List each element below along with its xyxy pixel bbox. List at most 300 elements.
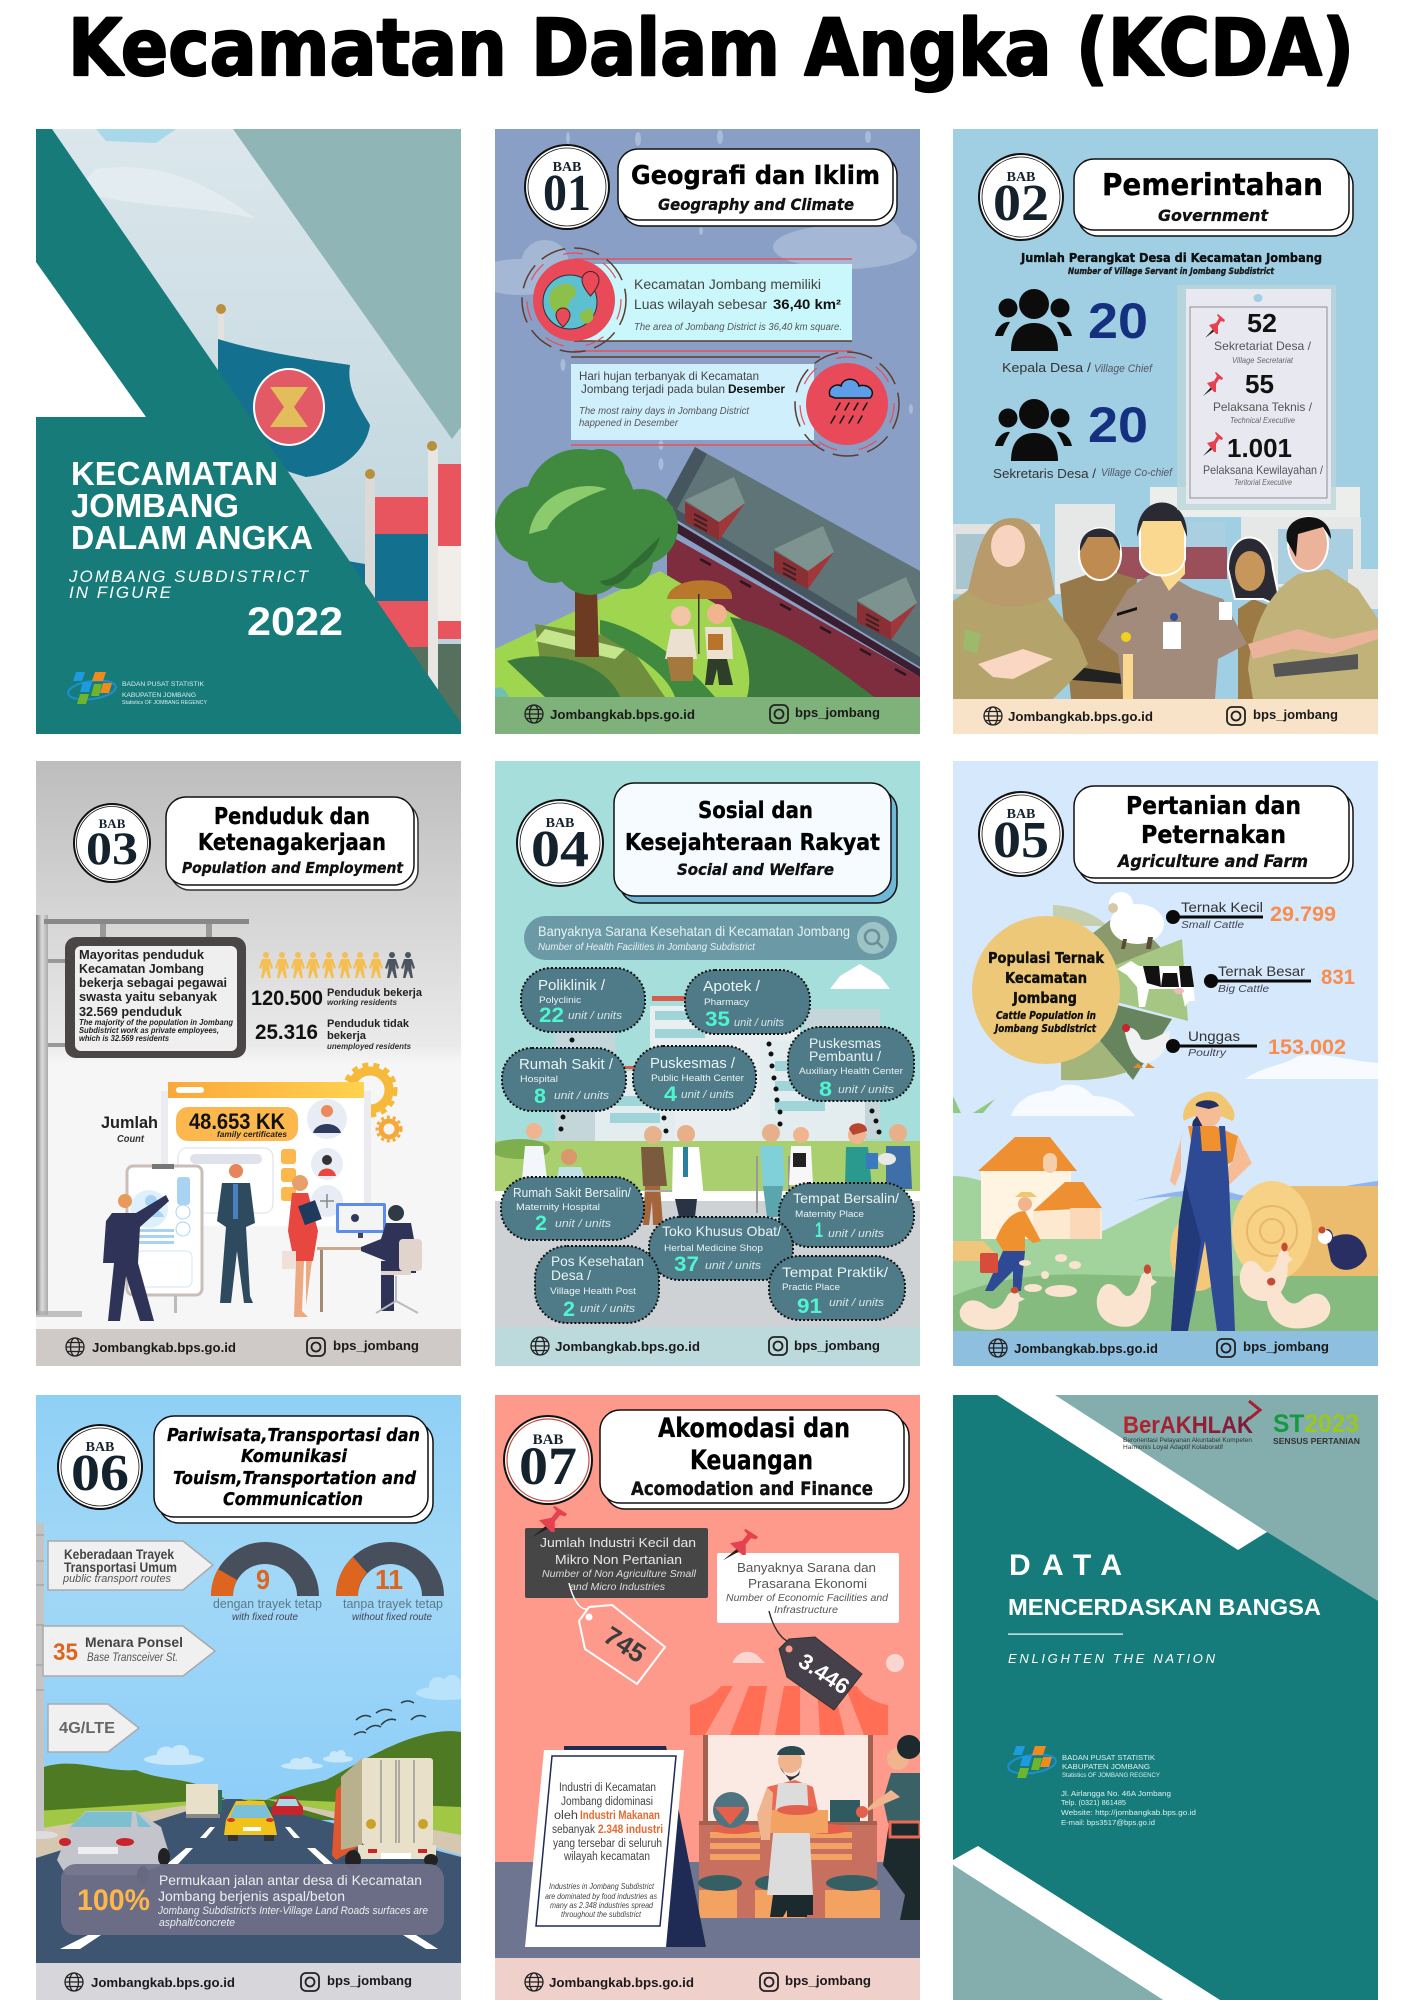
panel: Bab 05 agriculture and farm (953, 761, 1378, 1366)
market stall (690, 1686, 888, 1918)
bubble: herbal medicine shop: 37 (674, 1253, 699, 1276)
callout: big cattle (1204, 963, 1355, 995)
a-frame sign: oleh (554, 1810, 578, 1822)
sign: base transceiver station: 35 (53, 1639, 78, 1666)
sign: base transceiver station: Base Transceiver St. (87, 1650, 178, 1664)
bubble: public health center: Puskesmas / (650, 1055, 736, 1072)
area text: The area of Jombang District is 36,40 km square. (634, 322, 842, 333)
footer (36, 1329, 461, 1366)
flag: blue and red (350, 469, 428, 647)
gauge: without fixed route: tanpa trayek tetap (343, 1596, 443, 1611)
bubble: herbal medicine shop: Herbal Medicine Shop (664, 1243, 763, 1254)
chapter title box (614, 783, 897, 903)
staff card: Technical Executive (1230, 416, 1295, 425)
panel: back cover (953, 1395, 1378, 2000)
BPS logo and contact: E-mail: bps3517@bps.go.id (1061, 1818, 1155, 1827)
ground and road (490, 1139, 920, 1329)
bubble: polyclinic (521, 968, 645, 1032)
bubble: polyclinic: unit / units (568, 1010, 623, 1022)
stat: village co-chief (993, 397, 1173, 481)
sign: public transport routes: public transport routes (62, 1573, 171, 1585)
tree (495, 449, 678, 657)
chapter title box (618, 149, 897, 226)
a-frame sign: Industri Makanan (580, 1810, 660, 1822)
staff card: Sekretariat Desa / (1214, 339, 1312, 353)
footer: Jombangkab.bps.go.id (550, 707, 695, 722)
BPS logo: BADAN PUSAT STATISTIK (122, 681, 205, 688)
chapter title box: Acomodation and Finance (631, 1478, 873, 1500)
chapter title box (154, 1416, 433, 1523)
chapter badge: 06 (71, 1445, 129, 1502)
panel: Bab 01 geography and climate (475, 129, 920, 734)
doctor (672, 1125, 704, 1217)
bubble: pharmacy: Apotek / (703, 978, 761, 995)
bubble: maternity hospital (501, 1177, 644, 1240)
a-frame sign: wilayah kecamatan (563, 1851, 650, 1863)
employment sign: Subdistrict work as private employees, (79, 1026, 219, 1035)
callout: poultry: 153.002 (1268, 1036, 1346, 1059)
footer: Jombangkab.bps.go.id (92, 1340, 236, 1355)
hospital backdrop (555, 964, 890, 1151)
employment sign: Kecamatan Jombang (79, 961, 204, 976)
man on crutches (757, 1124, 789, 1217)
rainfall text: happened in Desember (579, 418, 679, 429)
official: woman right (1227, 536, 1278, 699)
chapter badge: BAB (546, 816, 574, 831)
population circle: Jombang Subdistrict (993, 1023, 1097, 1035)
watermelon (713, 1792, 749, 1828)
callout: family certificates: family certificates (217, 1129, 287, 1139)
cover title: DALAM ANGKA (71, 519, 313, 556)
a-frame sign: many as 2.348 industries spread (550, 1901, 653, 1910)
gears (345, 1065, 401, 1141)
card: economic facilities: Number of Economic Facilities and (726, 1592, 889, 1604)
sign: base transceiver station (43, 1626, 215, 1676)
vehicle: red car (272, 1796, 303, 1815)
official: central man (1097, 502, 1247, 699)
bubble: public health center: Public Health Center (651, 1073, 744, 1084)
chapter badge: BAB (553, 160, 581, 175)
sign: 4G/LTE (48, 1704, 139, 1752)
bubble: public health center (633, 1046, 756, 1110)
bubble: village health post (535, 1246, 659, 1323)
callout: road surface: Permukaan jalan antar desa di Kecamatan (159, 1872, 422, 1888)
pictogram: working and unemployed ratio (259, 952, 415, 978)
bubble: herbal medicine shop (649, 1217, 793, 1280)
panel: Bab 07 accommodation and finance (495, 1395, 921, 2000)
signpost (36, 915, 249, 1317)
top white stripe (997, 1395, 1267, 1550)
label: count (101, 1113, 158, 1145)
callout: road surface (61, 1864, 444, 1935)
stat: unemployed residents (255, 1018, 411, 1051)
chairs (953, 654, 1378, 699)
bubble: village health post: Village Health Post (550, 1286, 636, 1297)
official: second man (1060, 528, 1137, 699)
icon: rain cloud (795, 352, 899, 456)
flag: ASEAN (216, 304, 370, 477)
footer (953, 1331, 1378, 1366)
chapter badge (525, 145, 609, 229)
population circle: Jombang (1012, 989, 1077, 1007)
chapter title box: Communication (223, 1489, 363, 1510)
search banner: Banyaknya Sarana Kesehatan di Kecamatan Jombang (538, 923, 850, 939)
card: small and micro industries: and Micro Industries (570, 1581, 666, 1593)
logo: BerAKHLAK: BerAKHLAK (1123, 1412, 1254, 1439)
a-frame sign: throughout the subdistrict (561, 1910, 642, 1919)
slogan: DATA (1009, 1549, 1122, 1582)
population circle: Cattle Population in (996, 1010, 1096, 1022)
building roof with dormers (665, 447, 920, 697)
gauge: without fixed route (336, 1542, 444, 1623)
bubble: polyclinic: Poliklinik / (538, 977, 606, 994)
bottom corner shape (953, 1865, 1163, 2000)
callout: big cattle: Ternak Besar (1218, 963, 1305, 979)
panel: Bab 04 social and welfare (490, 761, 920, 1366)
bubble: maternity place: unit / units (828, 1228, 885, 1240)
employment sign: bekerja sebagai pegawai (79, 975, 227, 990)
slogan (1008, 1549, 1321, 1666)
sign: base transceiver station: Menara Ponsel (85, 1634, 183, 1650)
callout: small cattle (1166, 899, 1336, 931)
chapter title box: Social and Welfare (677, 860, 834, 879)
rainfall text (579, 369, 785, 429)
footer: bps_jombang (785, 1973, 871, 1988)
icon: chicken (1122, 1024, 1170, 1068)
customer (856, 1735, 921, 1920)
official: hijab woman (953, 518, 1088, 699)
old man with walker (641, 1126, 680, 1225)
bubble: herbal medicine shop: Toko Khusus Obat/ (662, 1223, 781, 1239)
bubble: public health center: unit / units (681, 1089, 735, 1101)
area info box (522, 248, 852, 352)
label: count: Count (117, 1134, 145, 1145)
chapter badge: 01 (543, 165, 591, 222)
bubble: auxiliary health center: Puskesmas (809, 1035, 881, 1051)
patient with sling (878, 1124, 912, 1189)
background buildings (953, 487, 1378, 609)
card: economic facilities (717, 1553, 899, 1623)
small farmer (980, 1192, 1041, 1291)
footer: Jombangkab.bps.go.id (555, 1339, 700, 1354)
footer: bps_jombang (333, 1338, 419, 1353)
bubble: village health post: Pos Kesehatan (551, 1253, 644, 1269)
price tag: 3.446 (769, 1611, 862, 1710)
gauge: with fixed route: with fixed route (232, 1612, 298, 1623)
chapter title box: Touism,Transportation and (173, 1468, 417, 1489)
BPS logo and contact: Telp. (0321) 861485 (1061, 1798, 1126, 1807)
desk, computer and seated man (317, 1203, 422, 1313)
callout: road surface: Jombang Subdistrict's Inter-Village Land Roads surfaces are (157, 1905, 428, 1917)
a-frame sign: Industri di Kecamatan (559, 1782, 656, 1794)
stat: working residents (251, 987, 423, 1010)
chapter title box: Government (1158, 206, 1269, 225)
area text: Kecamatan Jombang memiliki (634, 276, 821, 292)
connector dots (558, 1038, 882, 1134)
chickens (960, 1226, 1367, 1330)
bubble: hospital: 8 (534, 1085, 546, 1108)
bubble: village health post: unit / units (580, 1303, 636, 1315)
callout: small cattle: Ternak Kecil (1181, 899, 1263, 915)
bubble: practice place (769, 1256, 905, 1320)
staff card: 52 (1247, 308, 1277, 338)
section heading: Number of Village Servant in Jombang Subdistrict (1068, 267, 1275, 277)
employment sign: 32.569 penduduk (79, 1004, 183, 1019)
bubble: public health center: 4 (664, 1083, 677, 1106)
a-frame sign: 2.348 industri (598, 1824, 663, 1836)
callout: poultry (1166, 1028, 1346, 1059)
chapter title box: Geografi dan Iklim (631, 161, 880, 191)
chapter title box: Akomodasi dan (658, 1413, 850, 1444)
bubble: maternity place: Maternity Place (795, 1209, 864, 1220)
chapter title box (1074, 786, 1353, 883)
logo: ST2023 census: SENSUS PERTANIAN (1273, 1436, 1360, 1446)
footer: bps_jombang (795, 705, 880, 720)
bottom white stripe (953, 1846, 1220, 2000)
callout: small cattle: Small Cattle (1181, 920, 1245, 931)
footer (953, 699, 1378, 734)
bubble: village health post: Desa / (551, 1267, 591, 1283)
sign pole (22, 1523, 58, 1839)
rainfall text: Jombang terjadi pada bulan (581, 382, 725, 396)
rainfall text: Desember (728, 382, 785, 396)
vehicle: van (186, 1784, 222, 1818)
bubble: maternity hospital: Maternity Hospital (516, 1202, 600, 1213)
chapter title box: Penduduk dan (214, 804, 370, 830)
footer: bps_jombang (1253, 707, 1338, 722)
gauge: without fixed route: without fixed route (352, 1612, 432, 1623)
hay bales (953, 1181, 1378, 1291)
slogan: MENCERDASKAN BANGSA (1008, 1594, 1321, 1620)
chapter title box (166, 797, 418, 890)
bubble: hospital: unit / units (554, 1090, 610, 1102)
bubble: pharmacy (685, 970, 810, 1034)
BPS logo (67, 672, 208, 706)
bubble: auxiliary health center (788, 1027, 914, 1101)
cover title: JOMBANG SUBDISTRICT (68, 567, 310, 586)
bubble: pharmacy: unit / units (734, 1017, 784, 1029)
footer: bps_jombang (327, 1973, 412, 1988)
panel: Bab 03 population and employment (36, 761, 461, 1366)
bubble: practice place: 91 (797, 1295, 822, 1318)
dormer 3 (857, 577, 917, 640)
card: small and micro industries: Mikro Non Pertanian (555, 1552, 682, 1567)
bubble: practice place: Tempat Praktik/ (782, 1264, 888, 1280)
bubble: hospital: Rumah Sakit / (519, 1056, 614, 1073)
BPS logo and contact: Jl. Airlangga No. 46A Jombang (1061, 1789, 1171, 1798)
chapter title box: Kesejahteraan Rakyat (625, 830, 880, 856)
presentation board (127, 1164, 202, 1313)
bubble: maternity hospital: 2 (535, 1212, 547, 1235)
callout: big cattle: 831 (1321, 966, 1355, 989)
top corner shape (1055, 1395, 1378, 1601)
stat: unemployed residents: Penduduk tidak (327, 1018, 410, 1030)
chapter title box: Pariwisata,Transportasi dan (167, 1425, 420, 1446)
chapter badge: BAB (86, 1440, 114, 1455)
footer: bps_jombang (1243, 1339, 1329, 1354)
chapter title box: Population and Employment (182, 859, 404, 877)
chapter title box (600, 1410, 909, 1509)
a-frame sign: sebanyak (552, 1824, 595, 1836)
rainfall info box (571, 352, 899, 456)
chapter badge: 04 (531, 821, 589, 878)
area text: Luas wilayah sebesar (634, 296, 767, 312)
cover title: 2022 (247, 600, 343, 644)
staff card: Pelaksana Kewilayahan / (1203, 463, 1324, 477)
geese and small birds (1019, 1254, 1081, 1297)
footer (36, 1963, 461, 2000)
clouds (475, 217, 917, 295)
stat: village co-chief: 20 (1088, 397, 1148, 453)
staff card: 1.001 (1227, 433, 1292, 463)
BPS logo: Statistics OF JOMBANG REGENCY (122, 700, 208, 706)
awning (690, 1686, 888, 1735)
bubble: practice place: Practic Place (782, 1282, 840, 1293)
bubble: pharmacy: 35 (705, 1008, 730, 1031)
stat: unemployed residents: unemployed residents (327, 1041, 411, 1051)
chapter badge (58, 1425, 142, 1509)
BPS logo and contact: Website: http://jombangkab.bps.go.id (1061, 1808, 1196, 1817)
farm landscape (953, 1096, 1378, 1331)
chapter badge: BAB (1007, 807, 1035, 822)
label: count: Jumlah (101, 1113, 158, 1132)
teal nurse (845, 1123, 878, 1188)
logo: BerAKHLAK: Harmonis Loyal Adaptif Kolaboratif (1123, 1445, 1223, 1451)
bubble: village health post: 2 (563, 1298, 575, 1321)
bubble: maternity hospital: Rumah Sakit Bersalin/ (513, 1185, 631, 1200)
clouds and birds (144, 1675, 476, 1770)
chapter title box: Peternakan (1141, 820, 1286, 849)
pin on card 2 (723, 1529, 758, 1560)
chapter badge: BAB (533, 1432, 563, 1448)
farm houses (978, 1137, 1102, 1239)
crates (699, 1832, 880, 1918)
footer: Jombangkab.bps.go.id (91, 1975, 235, 1990)
stat: unemployed residents: 25.316 (255, 1021, 318, 1044)
panel: Bab 06 tourism, transportation and communication (22, 1395, 476, 2000)
rainfall text: The most rainy days in Jombang District (579, 406, 750, 417)
icon: cow (1117, 961, 1195, 1007)
price tag: 745: 745 (599, 1620, 651, 1669)
stat: village co-chief: Village Co-chief (1101, 467, 1173, 479)
search banner: Number of Health Facilities in Jombang Subdistrict (538, 942, 756, 953)
cover title: JOMBANG (71, 487, 239, 524)
panel: Bab 02 government (953, 129, 1378, 734)
a-frame sign: Industries in Jombang Subdistrict (549, 1882, 655, 1891)
population circle: Kecamatan (1005, 969, 1087, 987)
clouds (1011, 1055, 1378, 1116)
dashboard window (161, 1082, 371, 1226)
chapter title box: Agriculture and Farm (1116, 852, 1308, 872)
nurse and patient left (522, 1123, 585, 1179)
chart: livestock wedges (1053, 905, 1188, 1080)
search banner (524, 916, 897, 960)
logo: ST2023 census: ST2023 (1273, 1410, 1359, 1438)
chapter title box: Komunikasi (241, 1446, 348, 1467)
bubble: hospital (502, 1048, 626, 1111)
chapter title box: Keuangan (690, 1445, 813, 1476)
icon: globe with location pins (522, 248, 626, 352)
gauge: with fixed route: dengan trayek tetap (213, 1596, 322, 1611)
footer: Jombangkab.bps.go.id (1008, 709, 1153, 724)
farmer woman (1170, 1092, 1252, 1331)
chapter badge (979, 792, 1063, 876)
sign: 4G/LTE: 4G/LTE (59, 1720, 115, 1737)
BPS logo and contact: KABUPATEN JOMBANG (1062, 1762, 1150, 1771)
person: man pointing at board (103, 1194, 169, 1321)
chapter badge (517, 800, 603, 886)
dormer 1 (685, 477, 745, 540)
callout: family certificates: 48.653 KK (189, 1109, 285, 1134)
bubble: maternity place: 1 (815, 1219, 823, 1242)
bubble: hospital: Hospital (520, 1074, 558, 1085)
footer: bps_jombang (794, 1338, 880, 1353)
callout: big cattle: Big Cattle (1218, 984, 1270, 995)
card: economic facilities: Prasarana Ekonomi (748, 1576, 867, 1591)
chapter title box: Geography and Climate (658, 195, 854, 214)
seller (757, 1746, 828, 1917)
logo: BerAKHLAK (1123, 1401, 1260, 1451)
bubble: auxiliary health center: Auxiliary Health Center (799, 1066, 903, 1077)
card: small and micro industries: Jumlah Industri Kecil dan (540, 1535, 696, 1550)
terraced hill (495, 571, 874, 697)
card: economic facilities: Banyaknya Sarana dan (737, 1560, 876, 1575)
section heading: Jumlah Perangkat Desa di Kecamatan Jombang (1020, 250, 1322, 265)
sign: public transport routes (48, 1541, 213, 1590)
callout: road surface: asphalt/concrete (159, 1917, 235, 1929)
teal diagonal shape (36, 129, 461, 734)
chapter title box: Pemerintahan (1102, 168, 1323, 203)
employment sign (65, 937, 246, 1058)
pin on card 1 (532, 1506, 567, 1537)
callout: poultry: Poultry (1188, 1048, 1227, 1059)
icon: sheep (1108, 892, 1164, 949)
top right translucent shape (233, 129, 461, 439)
chapter badge (504, 1416, 592, 1504)
chapter badge: 02 (993, 175, 1049, 232)
vehicle: truck (332, 1758, 438, 1870)
cover title: KECAMATAN (71, 455, 278, 492)
price tag: 745 (569, 1583, 665, 1684)
chapter title box (1074, 159, 1353, 236)
staff card (1177, 285, 1336, 510)
bubble: herbal medicine shop: unit / units (705, 1260, 762, 1272)
ground (495, 1862, 920, 1958)
bubble: auxiliary health center: Pembantu / (809, 1048, 881, 1064)
bubble: maternity hospital: unit / units (555, 1218, 612, 1230)
staff card: Pelaksana Teknis / (1213, 400, 1313, 414)
callout: road surface: 100% (77, 1884, 150, 1917)
a-frame sign: Jombang didominasi (561, 1796, 653, 1808)
bubble: auxiliary health center: 8 (819, 1078, 832, 1101)
chapter title box: Ketenagakerjaan (198, 830, 386, 856)
chapter badge (979, 154, 1063, 240)
cover title: IN FIGURE (69, 583, 172, 602)
stat: working residents: working residents (327, 997, 397, 1007)
BPS logo and contact: Statistics OF JOMBANG REGENCY (1062, 1773, 1160, 1779)
footer (495, 697, 920, 734)
bubble: polyclinic: 22 (539, 1004, 564, 1027)
scale (830, 1800, 860, 1822)
area text: 36,40 km² (773, 296, 841, 312)
health workers and patients (522, 1123, 912, 1225)
vehicle: silver car (57, 1811, 170, 1884)
rainfall text: Hari hujan terbanyak di Kecamatan (579, 369, 759, 383)
staff card: 55 (1245, 369, 1274, 399)
cover title (68, 455, 343, 644)
callout: family certificates (176, 1107, 298, 1141)
footer (495, 1327, 920, 1366)
